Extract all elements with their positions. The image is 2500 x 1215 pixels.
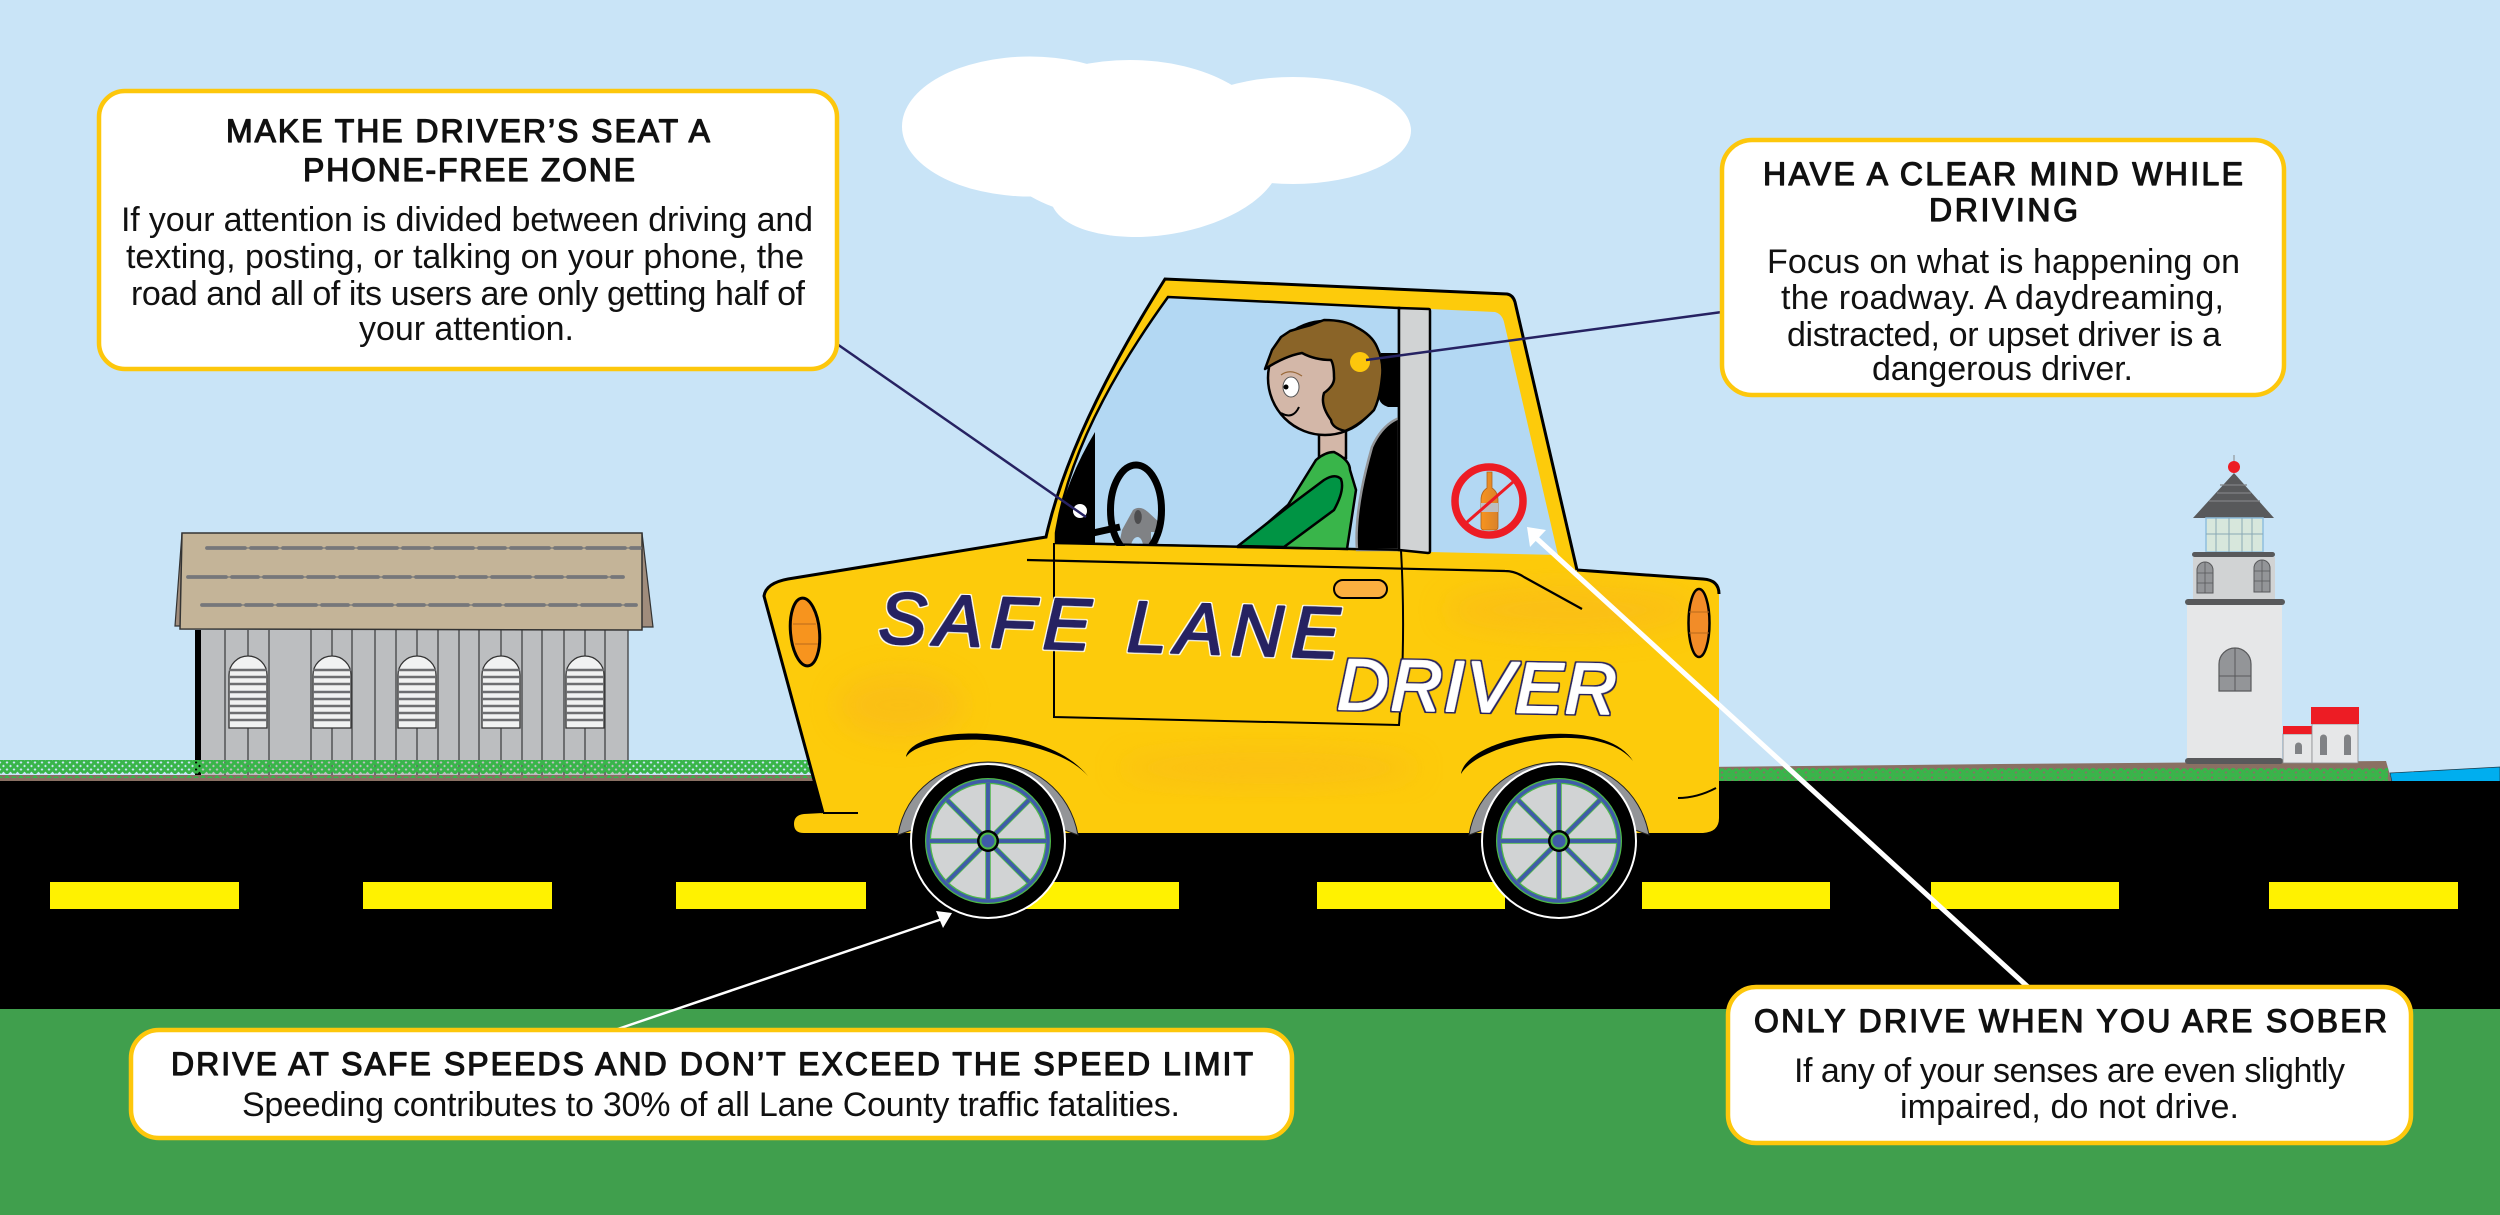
callout: sober [1728, 987, 2411, 1143]
car lettering: DRIVER: DRIVER [1337, 646, 1617, 730]
building: barn with vented windows [175, 533, 653, 776]
arm [1238, 476, 1342, 547]
road lane dashes [50, 882, 2458, 909]
arrow: speed callout to wheel [606, 911, 952, 1033]
heading line 2: DRIVING [1929, 192, 2078, 228]
heading line 2: PHONE-FREE ZONE [303, 152, 635, 188]
left grass strip [0, 760, 830, 782]
neck [1319, 430, 1346, 458]
pointer dot: driver head [1350, 352, 1370, 372]
ponytail [1379, 353, 1399, 407]
driver [1238, 320, 1399, 549]
eye [1283, 377, 1299, 397]
leader line: clear mind callout [1366, 312, 1722, 360]
heading: clear mind: HAVE A CLEAR MIND WHILE [1763, 156, 2243, 192]
body line 1: Focus on what is happening on [1767, 243, 2240, 281]
cloud [902, 56, 1411, 237]
heading: phone-free zone: MAKE THE DRIVER’S SEAT A [226, 113, 711, 149]
body line 2: texting, posting, or talking on your phone, the [126, 238, 804, 276]
body line 1: If your attention is divided between driving and [121, 201, 813, 239]
rear side window [1430, 309, 1558, 555]
no alcohol sign [1455, 467, 1523, 535]
body line 3: road and all of its users are only getting half of [131, 275, 806, 313]
torso [1240, 452, 1356, 549]
front side window [1056, 297, 1399, 550]
body line 4: your attention. [359, 310, 574, 348]
rear arch crescent [1461, 734, 1633, 774]
small keeper houses [2283, 707, 2359, 763]
right ground strip [1700, 761, 2392, 782]
right car light [1688, 589, 1710, 657]
steering wheel [1093, 465, 1162, 555]
body line 1: If any of your senses are even slightly [1794, 1052, 2345, 1090]
body line 2: the roadway. A daydreaming, [1781, 279, 2224, 317]
pointer dot: driver mirror [1073, 504, 1087, 518]
body outline [764, 279, 1719, 813]
door handle [1334, 580, 1387, 598]
callout: speed [131, 1030, 1292, 1138]
body line 2: impaired, do not drive. [1900, 1088, 2239, 1126]
grass foreground [0, 1009, 2500, 1215]
body line 3: distracted, or upset driver is a [1787, 316, 2221, 354]
driver seat [1357, 418, 1399, 550]
water [2390, 767, 2500, 782]
left car light [788, 597, 822, 667]
car lettering: SAFE LANE: SAFE LANE [877, 579, 1342, 674]
leader line: phone callout [837, 344, 1086, 517]
sky background [0, 0, 2500, 782]
body shading [850, 592, 1670, 778]
callout: clear mind [1722, 140, 2284, 395]
car [764, 279, 1719, 918]
lighthouse [2185, 455, 2285, 764]
rear wheel [1482, 764, 1636, 918]
hair [1265, 320, 1382, 431]
door pillar [1399, 308, 1430, 553]
heading: speed: DRIVE AT SAFE SPEEDS AND DON’T EXCEED THE SPEED LIMIT [171, 1046, 1253, 1082]
arrow: sober callout to no alcohol sign [1527, 527, 2028, 987]
black A pillar [1056, 432, 1095, 543]
front wheel [911, 764, 1065, 918]
rear fender [1469, 762, 1649, 835]
body line 4: dangerous driver. [1872, 350, 2133, 388]
callout: phone-free zone [99, 91, 837, 369]
car body [764, 279, 1719, 833]
door panel lines [823, 543, 1716, 813]
front fender [898, 762, 1078, 835]
front arch crescent [906, 734, 1088, 776]
road [0, 781, 2500, 1010]
heading: sober: ONLY DRIVE WHEN YOU ARE SOBER [1754, 1003, 2387, 1039]
body text: Speeding contributes to 30% of all Lane County traffic fatalities. [242, 1086, 1180, 1124]
head [1268, 321, 1382, 435]
